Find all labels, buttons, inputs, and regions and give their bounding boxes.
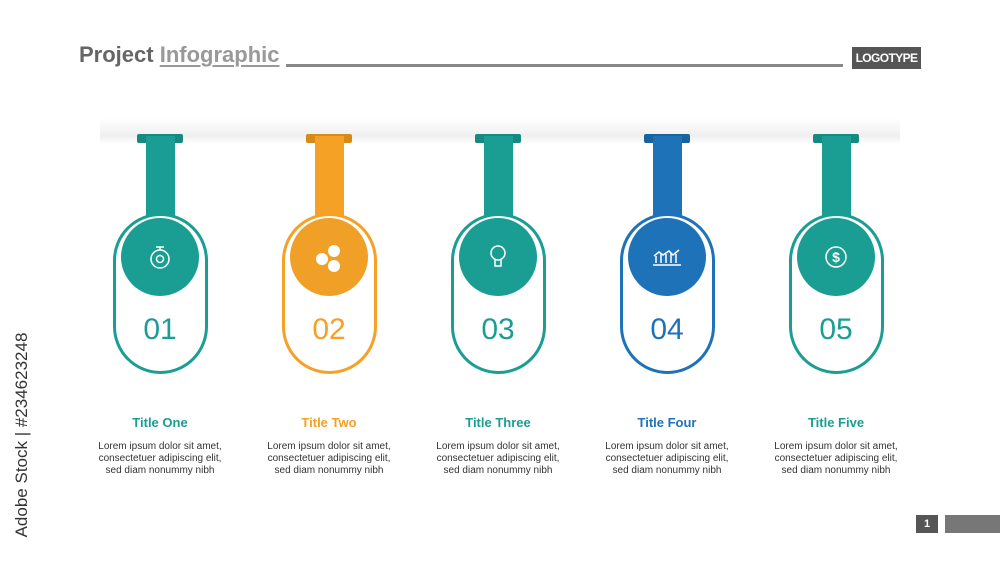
footer bar [945, 515, 1000, 533]
icon: chart [653, 250, 681, 265]
card 4: 04 [650, 313, 684, 346]
body three: Lorem ipsum dolor sit amet, [436, 441, 560, 452]
page number [916, 515, 938, 533]
icon: dollar cycle: $ [832, 249, 840, 265]
body one: sed diam nonummy nibh [106, 465, 214, 476]
body five [774, 441, 898, 476]
icon: stopwatch [151, 247, 169, 268]
body three: sed diam nonummy nibh [444, 465, 552, 476]
card 5 [790, 134, 882, 372]
card 3: 03 [481, 313, 515, 346]
icon: speech bubbles [316, 245, 340, 272]
body two: consectetuer adipiscing elit, [268, 453, 390, 464]
body five: consectetuer adipiscing elit, [775, 453, 897, 464]
body two: Lorem ipsum dolor sit amet, [267, 441, 391, 452]
body five: Lorem ipsum dolor sit amet, [774, 441, 898, 452]
body one: consectetuer adipiscing elit, [99, 453, 221, 464]
body three [436, 441, 560, 476]
body two [267, 441, 391, 476]
icon: dollar cycle [826, 247, 846, 267]
card 2 [284, 134, 376, 372]
text: two: Title Two [301, 415, 357, 430]
card 3 [452, 134, 544, 372]
text: five: Title Five [808, 415, 864, 430]
logotype: LOGOTYPE [856, 51, 917, 65]
icon: bulb [491, 246, 505, 266]
page number: 1 [924, 518, 930, 530]
cards [100, 127, 900, 374]
card 1: 01 [143, 313, 177, 346]
body four: sed diam nonummy nibh [613, 465, 721, 476]
logotype [852, 47, 921, 69]
body five: sed diam nonummy nibh [782, 465, 890, 476]
card 1 [114, 134, 206, 372]
card 2: 02 [312, 313, 346, 346]
body four: Lorem ipsum dolor sit amet, [605, 441, 729, 452]
body two: sed diam nonummy nibh [275, 465, 383, 476]
body four [605, 441, 729, 476]
body one [98, 441, 222, 476]
body four: consectetuer adipiscing elit, [606, 453, 728, 464]
title: Project Infographic [79, 42, 280, 67]
card 5: 05 [819, 313, 853, 346]
text: four: Title Four [638, 415, 696, 430]
side credit: Adobe Stock | #234623248 [12, 333, 31, 537]
header line [286, 64, 843, 67]
body one: Lorem ipsum dolor sit amet, [98, 441, 222, 452]
text: one: Title One [132, 415, 188, 430]
text: three: Title Three [465, 415, 531, 430]
body three: consectetuer adipiscing elit, [437, 453, 559, 464]
shadow band [100, 118, 900, 144]
card 4 [622, 134, 714, 372]
